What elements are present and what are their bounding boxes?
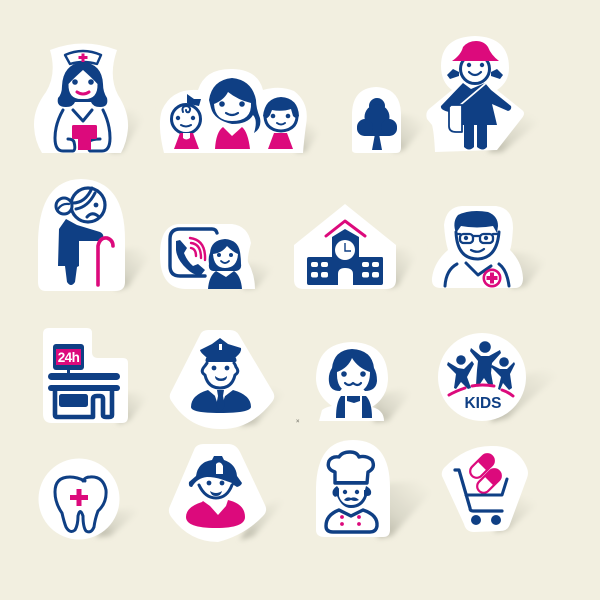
icon: woman with apron	[316, 342, 419, 422]
icon: 24h pharmacy counter	[43, 328, 154, 424]
icon: nurse	[34, 44, 150, 153]
icon: phone call with woman	[160, 224, 279, 289]
icon: firefighter	[169, 444, 294, 542]
icon: police officer	[170, 330, 294, 429]
icon: family	[160, 69, 322, 153]
icon: doctor	[432, 206, 552, 288]
icon: shopping cart with pills	[442, 446, 547, 532]
baby	[172, 94, 201, 149]
icon: school	[294, 204, 422, 289]
mother	[209, 78, 260, 149]
stray mark: ×	[296, 419, 300, 425]
icon: tree	[352, 87, 430, 153]
icon: kids logo: KIDS	[464, 395, 502, 412]
icon: girl with bag	[426, 36, 552, 152]
icon: chef	[316, 440, 444, 538]
icon: 24h pharmacy counter: 24h	[58, 350, 80, 365]
boy	[263, 97, 299, 149]
icon: elderly woman with cane	[38, 179, 157, 291]
icon: tooth	[38, 458, 149, 540]
icon: kids logo	[438, 333, 574, 422]
